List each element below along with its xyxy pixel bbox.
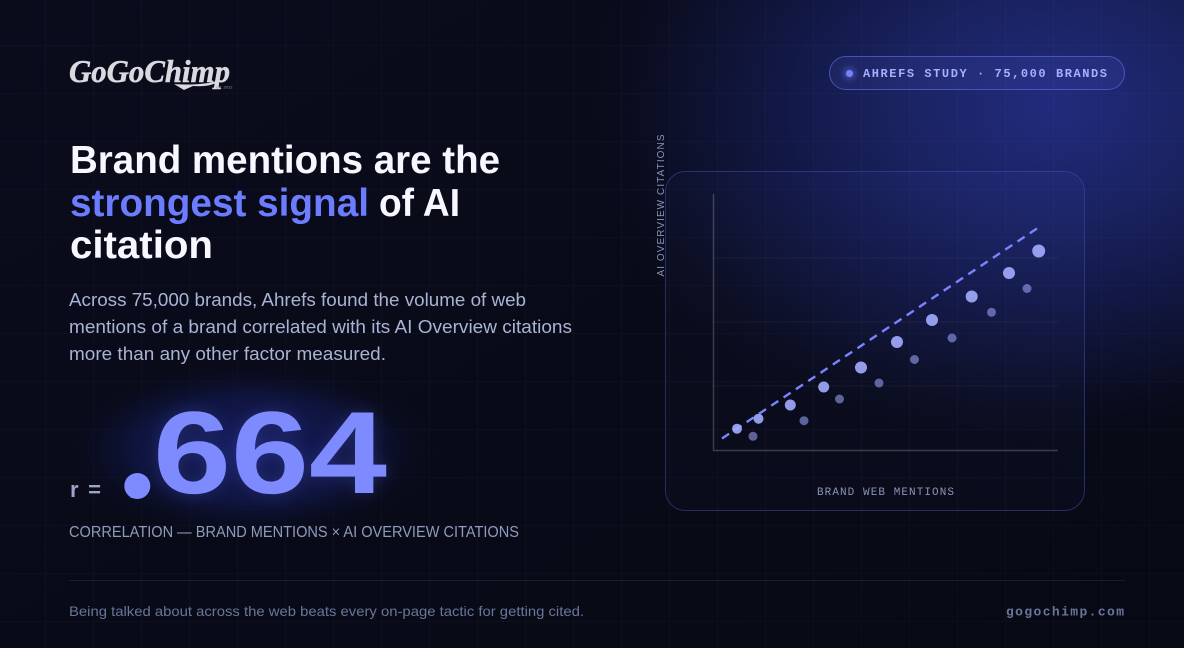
body text: mentions of a brand correlated with its AI Overview citations xyxy=(69,317,572,337)
badge: Ahrefs study xyxy=(830,56,1124,90)
chart axes xyxy=(714,194,1058,450)
body text: Across 75,000 brands, Ahrefs found the volume of web xyxy=(69,290,526,310)
big stat: r = .664: r = xyxy=(70,477,101,502)
footer divider xyxy=(69,580,1125,582)
logo: GoGoChimp: GoGoChimp xyxy=(69,53,230,89)
headline: strongest signal xyxy=(70,182,369,225)
body text: more than any other factor measured. xyxy=(69,344,386,364)
trend line xyxy=(722,228,1037,438)
badge: Ahrefs study: AHREFS STUDY · 75,000 BRANDS xyxy=(863,67,1107,81)
big stat: r = .664: . xyxy=(128,463,139,507)
headline: of AI xyxy=(379,182,460,225)
stat caption: CORRELATION — BRAND MENTIONS × AI OVERVIEW CITATIONS xyxy=(69,524,519,541)
headline xyxy=(70,139,500,267)
big stat: r = .664: 664 xyxy=(153,387,387,518)
headline: Brand mentions are the xyxy=(70,139,500,182)
x axis label: BRAND WEB MENTIONS xyxy=(817,487,954,499)
y axis label: AI OVERVIEW CITATIONS xyxy=(656,134,667,276)
big stat: r = .664: 664 xyxy=(153,387,387,518)
chart panel xyxy=(666,172,1084,510)
footer url: gogochimp.com xyxy=(1006,604,1124,620)
primary data points xyxy=(732,244,1045,434)
logo: GoGoChimp: est. 2012 xyxy=(216,84,233,90)
big stat: r = .664 xyxy=(60,360,440,540)
secondary data points xyxy=(748,284,1032,441)
footer tagline: Being talked about across the web beats every on-page tactic for getting cited. xyxy=(69,603,584,619)
headline: citation xyxy=(70,224,213,267)
body text xyxy=(69,290,572,364)
